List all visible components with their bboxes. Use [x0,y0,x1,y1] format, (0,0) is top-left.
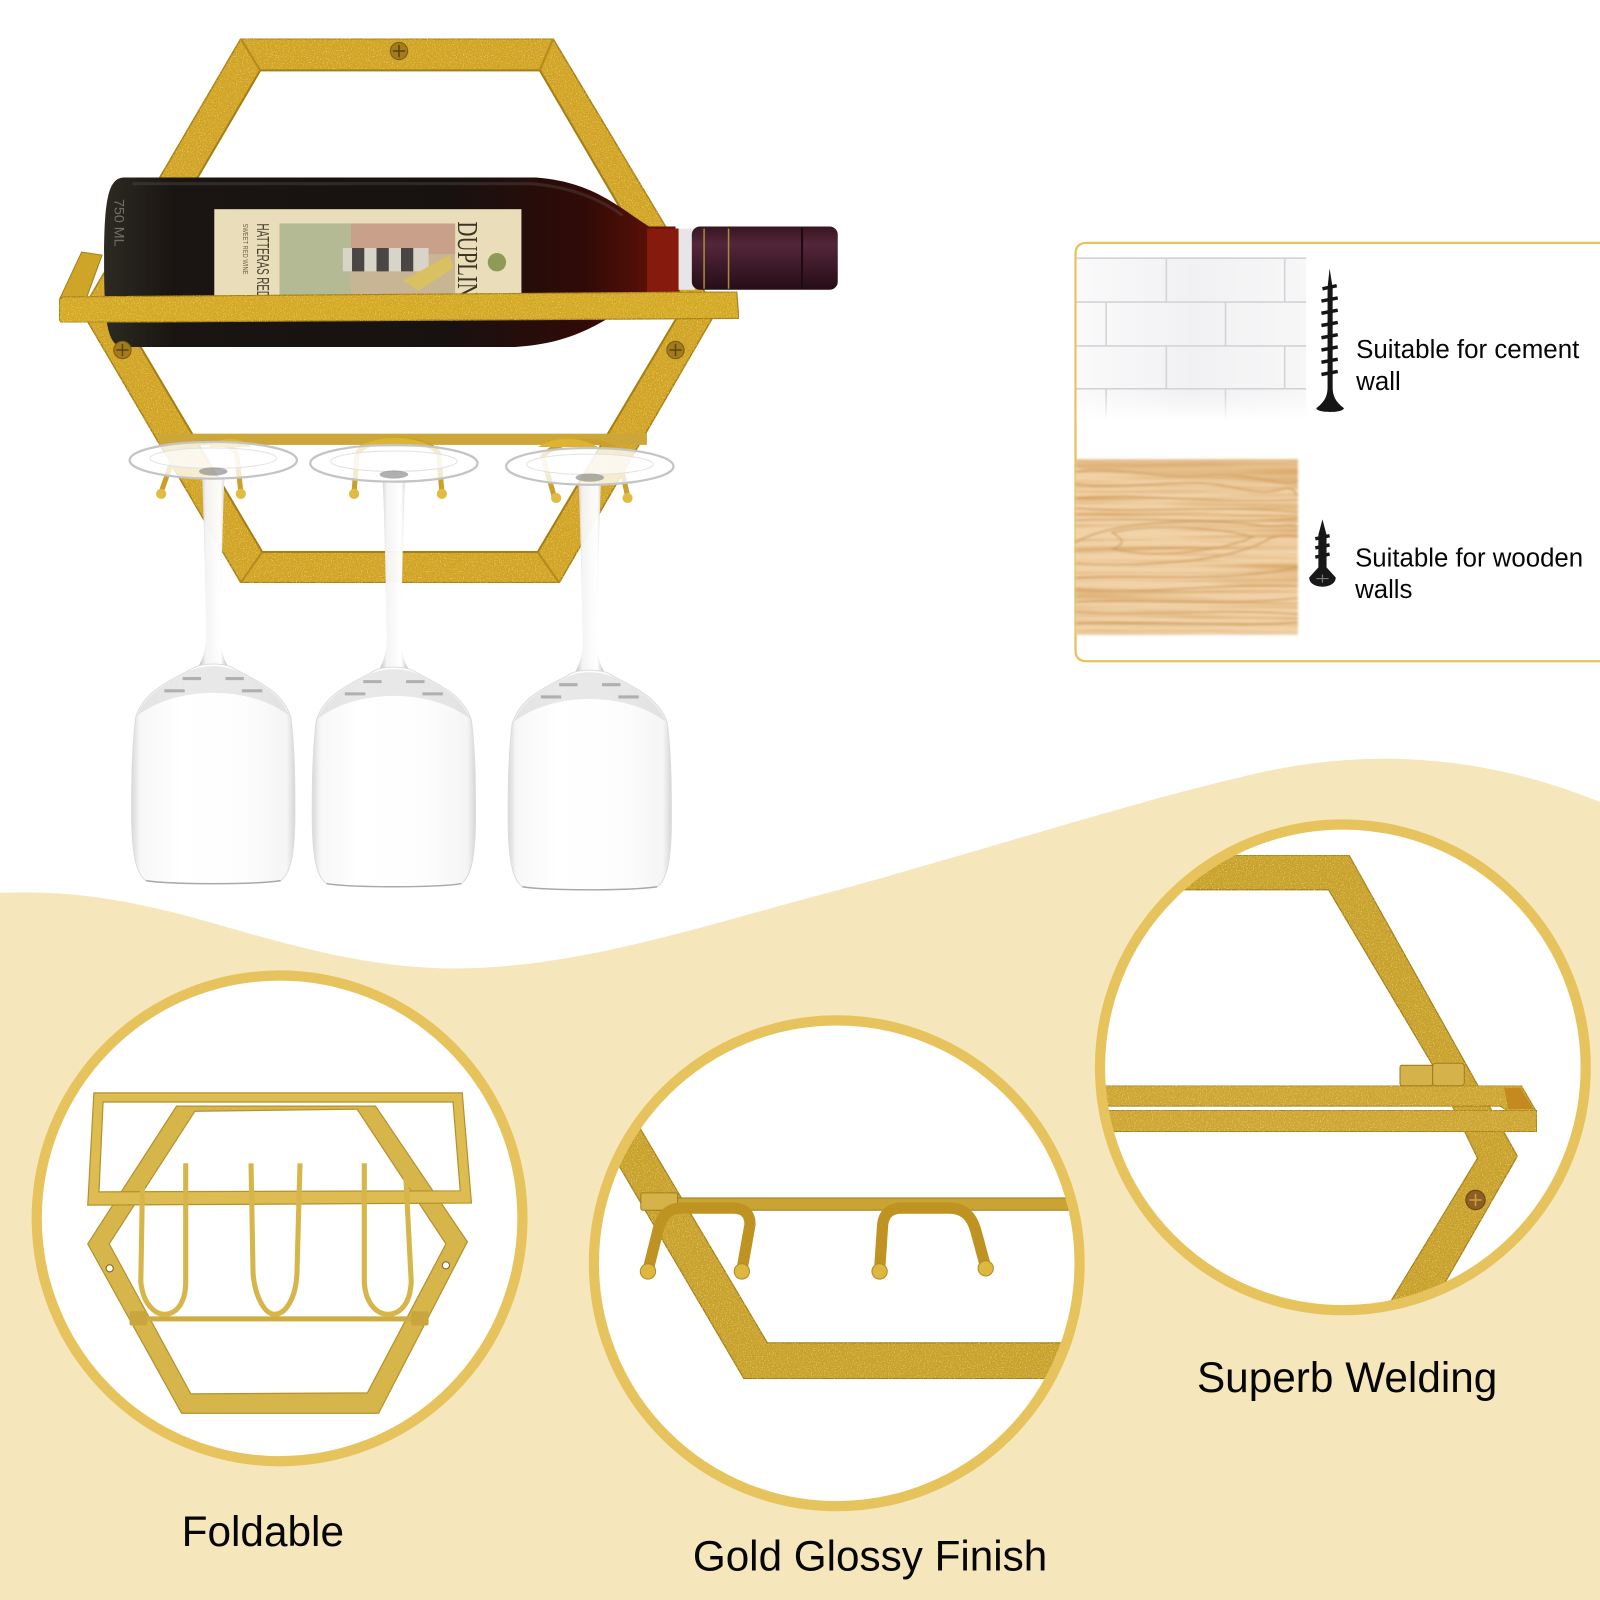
finish closeup illustration [619,1128,1069,1379]
hanging rod [159,434,647,445]
wine glass middle [310,445,478,887]
mount hole left [106,1265,113,1272]
suitable for wooden text: Suitable for wooden [1355,544,1583,572]
hinge [1400,1063,1464,1086]
hook left [648,1208,750,1270]
panel: superb welding detail [1100,824,1586,1401]
panel: gold glossy finish detail [594,1020,1092,1579]
long black screw [1316,268,1344,412]
panel: foldable detail [37,976,522,1555]
hook pins [640,1261,993,1279]
suitable for wooden text [1354,544,1583,604]
mount hole right [442,1262,449,1269]
welding closeup illustration [1106,855,1537,1300]
suitable for wooden text: walls [1354,576,1412,604]
bottle neck [647,229,680,294]
short black screw [1309,519,1336,587]
U hook one [141,1163,186,1314]
U hook two [251,1163,300,1314]
suitable for cement text [1355,336,1580,396]
textured frame with weld corner [1184,855,1518,1300]
suitable for cement text: Suitable for cement [1356,336,1580,364]
right hinge [411,1311,429,1326]
finish circle background [594,1020,1080,1506]
cream wave background [0,759,1600,1600]
welding ring [1100,824,1586,1310]
left hinge [130,1311,147,1326]
folded rack illustration [88,1093,471,1413]
screw left [114,341,131,359]
foldable ring [37,976,522,1461]
hinge [641,1193,678,1210]
U hook three [364,1163,411,1314]
wine label: HATTERAS RED [253,223,273,298]
wine label [214,209,521,301]
white tile wall image [1077,257,1306,421]
wine bottle [104,178,838,347]
hook right [880,1208,986,1270]
shelf side bar [59,252,102,300]
glass hooks [156,438,633,503]
shelf rear bar [1102,1086,1537,1112]
finish ring [594,1020,1080,1506]
product: hexagon wine rack with bottle and glasses [59,39,838,890]
folded shelf frame [88,1093,471,1205]
wine glass left [130,442,297,884]
welding label: Superb Welding [1197,1354,1497,1401]
hexagon frame [82,39,716,583]
welding circle background [1100,824,1586,1310]
suitable for cement text: wall [1355,368,1401,396]
wood panel image [1076,459,1298,635]
wine label: SWEET RED WINE [241,223,249,275]
wine glass right [506,448,673,890]
thin rod [653,1198,1071,1210]
shelf front bar [1106,1110,1537,1132]
base marking: 750 ML [110,199,126,247]
screw top [390,42,408,60]
foldable circle background [37,976,522,1461]
folded hexagon [88,1106,467,1413]
capsule [692,227,838,290]
finish label: Gold Glossy Finish [693,1532,1047,1579]
textured frame corner [619,1128,1061,1379]
lower rod [136,1316,421,1321]
panel border [1076,243,1600,661]
screw right [667,341,684,359]
shelf front bar [59,292,739,322]
wine label: DUPLIN [451,221,482,298]
shelf inner end [1504,1088,1534,1109]
screw [1466,1190,1485,1210]
panel: wall compatibility [1076,243,1600,661]
foldable label: Foldable [182,1508,344,1555]
